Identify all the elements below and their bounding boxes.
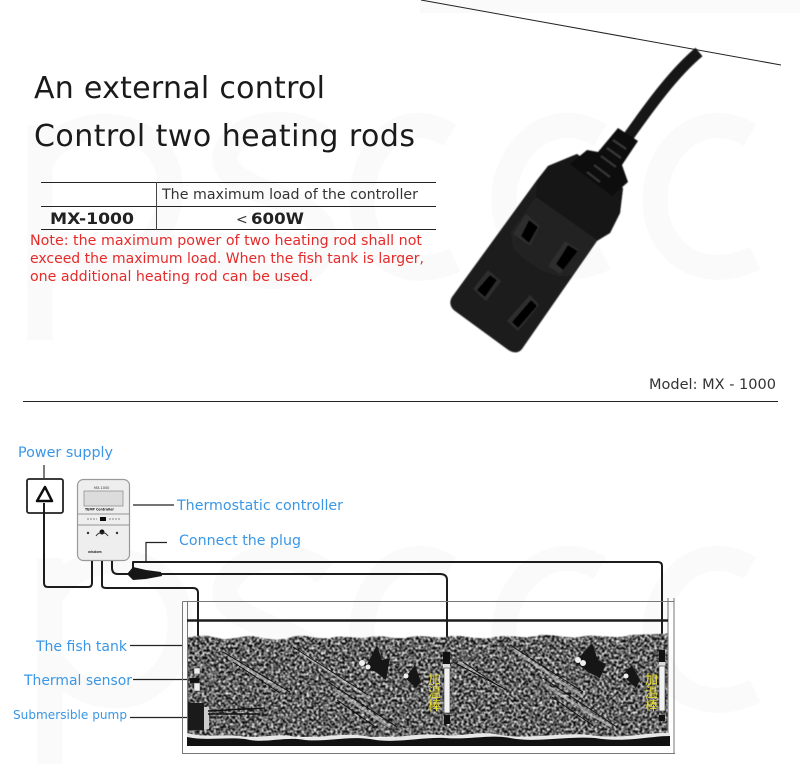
plug body: [450, 154, 623, 352]
ribs: [587, 140, 626, 182]
wall socket icon: [27, 465, 63, 513]
thermostatic controller: wisdom: [88, 550, 102, 554]
tank water: [187, 633, 668, 737]
controller display: [84, 491, 123, 506]
divider: [23, 400, 778, 402]
note text: exceed the maximum load. When the fish tank is larger,: [30, 251, 424, 267]
watermark: bottom letters: [50, 557, 755, 764]
diagonal line: [421, 0, 781, 65]
wires: [44, 503, 662, 668]
connector plug: [127, 567, 162, 580]
fish tank: [182, 598, 675, 754]
heater rod right: [659, 650, 665, 721]
watermark: top letters: [40, 124, 755, 340]
gravel: [187, 733, 670, 745]
shoulder band: [536, 154, 623, 240]
strain relief: [570, 128, 638, 196]
fish: [365, 643, 640, 688]
heater labels: 加: [428, 669, 441, 688]
thermostatic controller: MX-1000: [94, 486, 109, 490]
power plug photo: [450, 52, 699, 352]
bottom left slot: [473, 270, 501, 301]
wiring diagram labels: [13, 445, 343, 722]
spec table: The maximum load of the controller: [161, 187, 418, 203]
note text: one additional heating rod can be used.: [30, 269, 313, 285]
controller dial: [100, 530, 104, 534]
thermal sensor: [190, 668, 200, 691]
model label: Model: MX - 1000: [649, 377, 776, 393]
thermostatic controller: [78, 480, 130, 560]
top left slot: [513, 214, 540, 246]
watermark: top band: [420, 0, 800, 13]
heater rod middle: [443, 652, 450, 724]
heater labels: 棒: [428, 695, 441, 714]
spec table: [41, 182, 436, 230]
wiring diagram labels: Submersible pump: [13, 708, 127, 722]
top right slot: [548, 241, 579, 274]
heater labels: [428, 669, 658, 714]
heater labels: 温: [428, 682, 441, 701]
plug cable: [626, 52, 699, 140]
tank frame: [182, 598, 675, 754]
spec table: 600W: [251, 209, 304, 228]
thermostatic controller: TEMP Controller: [85, 508, 114, 512]
spec table: <: [236, 212, 248, 228]
leader lines: [130, 505, 192, 718]
heading: [34, 71, 415, 154]
spec table: MX-1000: [50, 209, 134, 228]
top rail: [187, 619, 668, 622]
note text: [30, 233, 424, 285]
note text: Note: the maximum power of two heating rod shall not: [30, 233, 422, 249]
heading: Control two heating rods: [34, 119, 415, 154]
wiring diagram labels: Thermostatic controller: [176, 498, 343, 514]
wiring diagram labels: Power supply: [18, 445, 113, 461]
wiring diagram labels: Thermal sensor: [23, 673, 132, 689]
wiring diagram labels: The fish tank: [35, 639, 128, 655]
heater labels: 加: [645, 669, 658, 688]
heater labels: 棒: [645, 695, 658, 714]
bottom right slot: [507, 295, 539, 331]
submersible pump: [188, 703, 265, 730]
raised socket face: [511, 197, 597, 276]
glass rods: [228, 650, 612, 727]
heater labels: 温: [645, 682, 658, 701]
wiring diagram labels: Connect the plug: [179, 533, 301, 549]
heading: An external control: [34, 71, 325, 106]
